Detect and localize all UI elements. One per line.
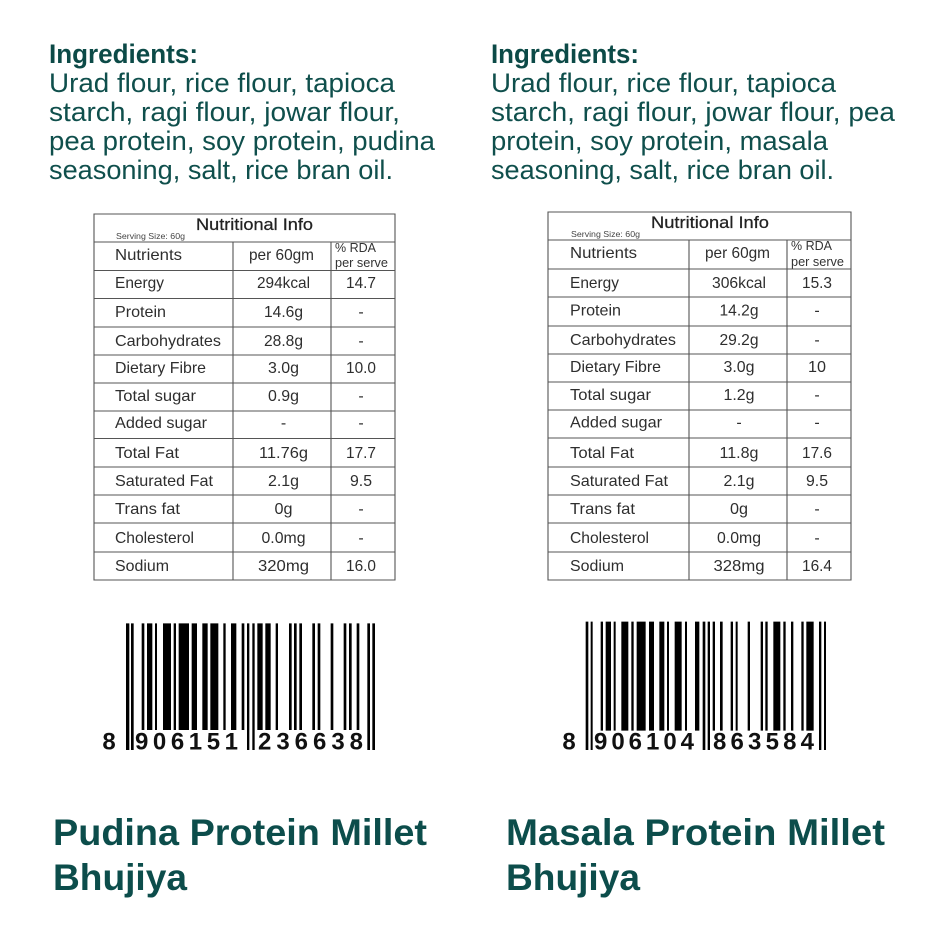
per 60gm values xyxy=(257,275,310,575)
RDA values: - xyxy=(814,332,820,349)
row labels: Total Fat xyxy=(570,445,635,462)
product title: pudina: Pudina Protein Millet xyxy=(53,811,428,853)
RDA values: - xyxy=(358,333,364,350)
column headers: per 60gm xyxy=(249,247,314,264)
per 60gm values: 2.1g xyxy=(268,473,299,490)
table title: Nutritional Info xyxy=(651,213,769,232)
column headers: per 60gm xyxy=(705,245,770,262)
row labels xyxy=(115,275,221,575)
per 60gm values: 306kcal xyxy=(712,275,766,292)
column headers: % RDA xyxy=(335,240,376,255)
row labels: Sodium xyxy=(570,558,624,575)
row labels: Carbohydrates xyxy=(115,333,221,350)
column headers: % RDA xyxy=(791,238,832,253)
ingredients: pudina: Ingredients: xyxy=(49,39,198,69)
row labels: Energy xyxy=(570,275,619,292)
row labels: Carbohydrates xyxy=(570,332,676,349)
row labels: Total sugar xyxy=(570,387,652,404)
row labels: Dietary Fibre xyxy=(115,360,206,377)
ingredients: masala: starch, ragi flour, jowar flour, pea xyxy=(491,97,895,127)
nutrition table: pudina xyxy=(94,214,395,580)
row labels: Total sugar xyxy=(115,388,197,405)
column headers: Nutrients xyxy=(570,245,637,262)
ingredients: masala: Urad flour, rice flour, tapioca xyxy=(491,68,836,98)
RDA values: 15.3 xyxy=(802,275,832,292)
per 60gm values: 2.1g xyxy=(724,473,754,490)
row labels: Protein xyxy=(115,304,166,321)
per 60gm values: 14.6g xyxy=(264,304,303,321)
per 60gm values: 11.8g xyxy=(720,445,758,462)
barcode: pudina: 8 xyxy=(102,728,116,756)
column headers xyxy=(115,240,388,270)
ingredients: masala: seasoning, salt, rice bran oil. xyxy=(491,155,834,185)
per 60gm values xyxy=(712,275,766,575)
row labels: Trans fat xyxy=(115,501,181,518)
barcode: pudina: 236638 xyxy=(258,728,363,756)
column headers: Nutrients xyxy=(115,247,182,264)
per 60gm values: 320mg xyxy=(258,558,309,575)
row labels: Sodium xyxy=(115,558,169,575)
RDA values: - xyxy=(358,501,364,518)
RDA values xyxy=(346,275,376,575)
RDA values xyxy=(802,275,832,575)
per 60gm values: 28.8g xyxy=(264,333,303,350)
row labels: Added sugar xyxy=(570,414,663,432)
per 60gm values: 0g xyxy=(730,501,748,518)
ingredients: pudina: seasoning, salt, rice bran oil. xyxy=(49,155,393,185)
per 60gm values: 0.0mg xyxy=(717,530,761,547)
row labels: Added sugar xyxy=(115,415,208,432)
row labels: Protein xyxy=(570,302,621,320)
RDA values: - xyxy=(814,530,820,547)
barcode: pudina xyxy=(102,623,375,756)
per 60gm values: 0g xyxy=(274,501,292,518)
per 60gm values: 14.2g xyxy=(720,302,758,320)
row labels: Cholesterol xyxy=(570,530,649,547)
per 60gm values: 3.0g xyxy=(268,360,299,377)
table title: Nutritional Info xyxy=(196,215,313,234)
barcode: pudina: 906151 xyxy=(135,728,238,756)
row labels: Cholesterol xyxy=(115,530,194,547)
RDA values: 10 xyxy=(808,359,826,376)
ingredients: pudina: pea protein, soy protein, pudina xyxy=(49,126,435,156)
per 60gm values: 11.76g xyxy=(259,445,308,462)
per 60gm values: 29.2g xyxy=(720,332,758,349)
per 60gm values: 328mg xyxy=(714,558,764,575)
column headers: per serve xyxy=(791,254,844,269)
barcode: masala xyxy=(562,622,826,756)
row labels: Energy xyxy=(115,275,164,292)
row labels: Total Fat xyxy=(115,445,180,462)
column headers xyxy=(570,238,844,269)
RDA values: 16.0 xyxy=(346,558,376,575)
product title: pudina xyxy=(53,811,428,898)
RDA values: - xyxy=(814,302,820,320)
per 60gm values: 294kcal xyxy=(257,275,310,292)
RDA values: 9.5 xyxy=(806,473,828,490)
RDA values: - xyxy=(358,530,364,547)
per 60gm values: - xyxy=(281,415,286,432)
RDA values: 10.0 xyxy=(346,360,376,377)
RDA values: 9.5 xyxy=(350,473,372,490)
RDA values: - xyxy=(814,387,820,404)
ingredients: pudina: Urad flour, rice flour, tapioca xyxy=(49,68,395,98)
RDA values: - xyxy=(814,501,820,518)
ingredients: masala: Ingredients: xyxy=(491,39,639,69)
serving size: Serving Size: 60g xyxy=(116,231,185,241)
row labels: Dietary Fibre xyxy=(570,359,661,376)
barcode: masala: 863584 xyxy=(713,728,815,756)
column headers: per serve xyxy=(335,255,388,270)
serving size: Serving Size: 60g xyxy=(571,229,640,239)
barcode: masala: 906104 xyxy=(594,728,695,756)
ingredients: masala xyxy=(491,39,895,185)
row labels xyxy=(570,275,676,575)
per 60gm values: 0.9g xyxy=(268,388,299,405)
product title: masala: Masala Protein Millet xyxy=(506,811,886,853)
product title: masala xyxy=(506,811,886,898)
RDA values: - xyxy=(358,388,364,405)
ingredients: pudina: starch, ragi flour, jowar flour, xyxy=(49,97,400,127)
row labels: Saturated Fat xyxy=(115,473,214,490)
row labels: Trans fat xyxy=(570,501,636,518)
RDA values: - xyxy=(358,304,364,321)
barcode: masala: 8 xyxy=(562,728,576,756)
per 60gm values: 0.0mg xyxy=(262,530,306,547)
ingredients: pudina xyxy=(49,39,435,185)
RDA values: - xyxy=(814,414,820,432)
product title: pudina: Bhujiya xyxy=(53,856,188,898)
product title: masala: Bhujiya xyxy=(506,856,641,898)
row labels: Saturated Fat xyxy=(570,473,669,490)
RDA values: 17.6 xyxy=(802,445,832,462)
nutrition table: masala xyxy=(548,212,851,580)
per 60gm values: 1.2g xyxy=(724,387,754,404)
RDA values: 16.4 xyxy=(802,558,832,575)
RDA values: 17.7 xyxy=(346,445,376,462)
RDA values: - xyxy=(358,415,364,432)
per 60gm values: 3.0g xyxy=(724,359,754,376)
ingredients: masala: protein, soy protein, masala xyxy=(491,126,828,156)
per 60gm values: - xyxy=(736,414,742,432)
RDA values: 14.7 xyxy=(346,275,376,292)
